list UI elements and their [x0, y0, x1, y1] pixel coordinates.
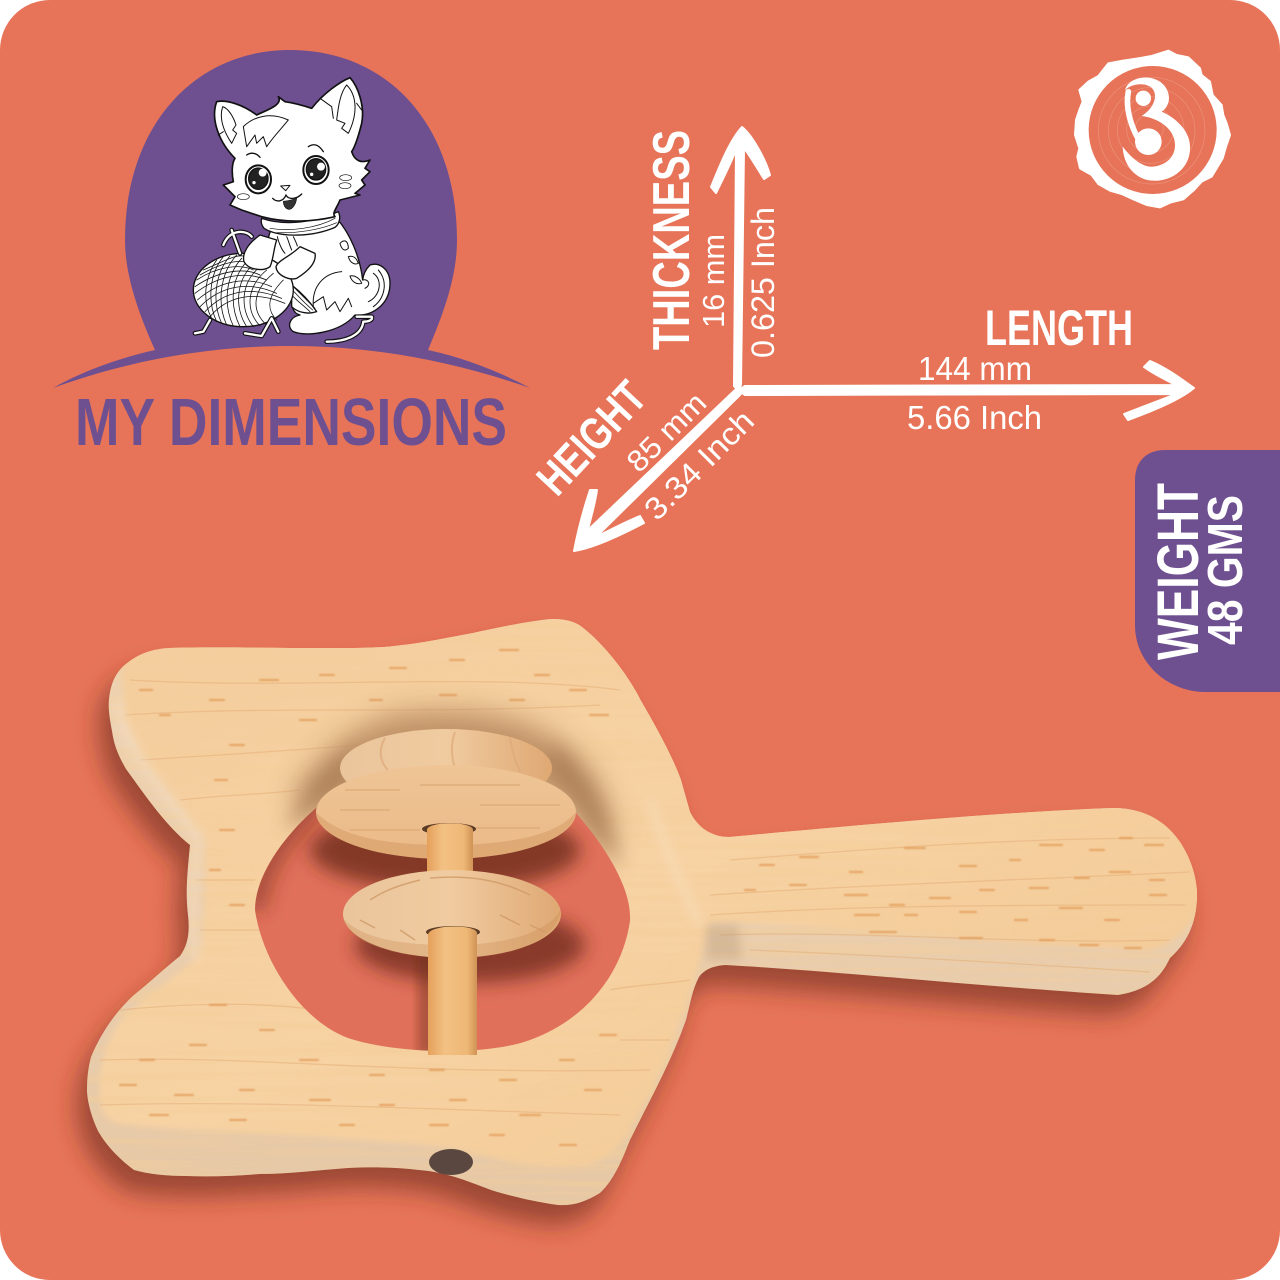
panel: weight tab	[1135, 450, 1280, 692]
paws	[244, 235, 277, 269]
disc hole	[422, 823, 476, 835]
eyes	[246, 145, 329, 193]
value: 16 mm: 16 mm	[696, 234, 731, 328]
heading: my dimensions: MY DIMENSIONS	[75, 385, 507, 460]
value: 85 mm: 85 mm	[621, 386, 713, 479]
upper dowel front	[427, 823, 473, 873]
small disc	[343, 870, 561, 1053]
lower dowel front	[428, 926, 477, 1053]
lower dowel	[428, 925, 477, 1055]
front upper disc	[316, 765, 576, 873]
label: height: HEIGHT	[526, 371, 656, 505]
hole inner wall	[285, 710, 622, 870]
small disc hole	[426, 926, 480, 938]
icon: brand logo	[1075, 51, 1230, 207]
product: wooden rattle	[77, 590, 1210, 1225]
yarn ball	[292, 285, 317, 313]
weight tab shape	[1135, 450, 1280, 692]
icon: kitten with yarn ball	[193, 78, 390, 342]
label: weight: WEIGHT	[1146, 483, 1211, 660]
rattle bevel highlight	[118, 700, 700, 960]
label: thickness: THICKNESS	[643, 130, 701, 350]
value: 5.66 inch: 5.66 Inch	[907, 399, 1042, 436]
cheek marks	[237, 175, 352, 200]
upper dowel	[427, 815, 473, 880]
value: 0.625 inch: 0.625 Inch	[745, 207, 781, 358]
wood grain bands	[87, 673, 1172, 1204]
rattle edge thickness	[87, 619, 1197, 1205]
knot in wood	[429, 1149, 473, 1175]
logo torn ring	[1075, 51, 1230, 207]
arrow: thickness	[711, 127, 770, 391]
hole opening	[255, 780, 630, 1051]
purple dome with swoosh	[53, 50, 530, 388]
wood flecks	[120, 650, 1166, 1145]
hole cast shadows	[255, 800, 585, 1055]
collar	[261, 212, 340, 235]
arrow: height	[574, 390, 741, 551]
arrow: length	[738, 361, 1194, 420]
logo swirl numeral	[1123, 78, 1190, 181]
rattle surface	[80, 590, 1210, 1210]
panel: my dimensions badge	[53, 50, 530, 460]
nose and mouth	[281, 185, 290, 191]
value: 48 gms: 48 GMS	[1199, 495, 1253, 645]
back disc	[340, 729, 552, 807]
logo wood rings	[1098, 77, 1205, 184]
rattle top face	[100, 590, 1210, 1167]
value: 144 mm: 144 mm	[918, 350, 1032, 387]
label: length: LENGTH	[985, 300, 1133, 356]
chart: dimension axes	[526, 127, 1194, 551]
wood grain lines	[100, 680, 1190, 1115]
ear and forehead fur	[218, 85, 362, 147]
value: 3.34 inch: 3.34 Inch	[637, 403, 761, 527]
yarn strands	[195, 230, 372, 342]
kitten body	[268, 218, 390, 334]
head and ears	[215, 78, 370, 221]
rattle drop shadow	[77, 639, 1187, 1225]
handle joint shading	[706, 925, 742, 960]
